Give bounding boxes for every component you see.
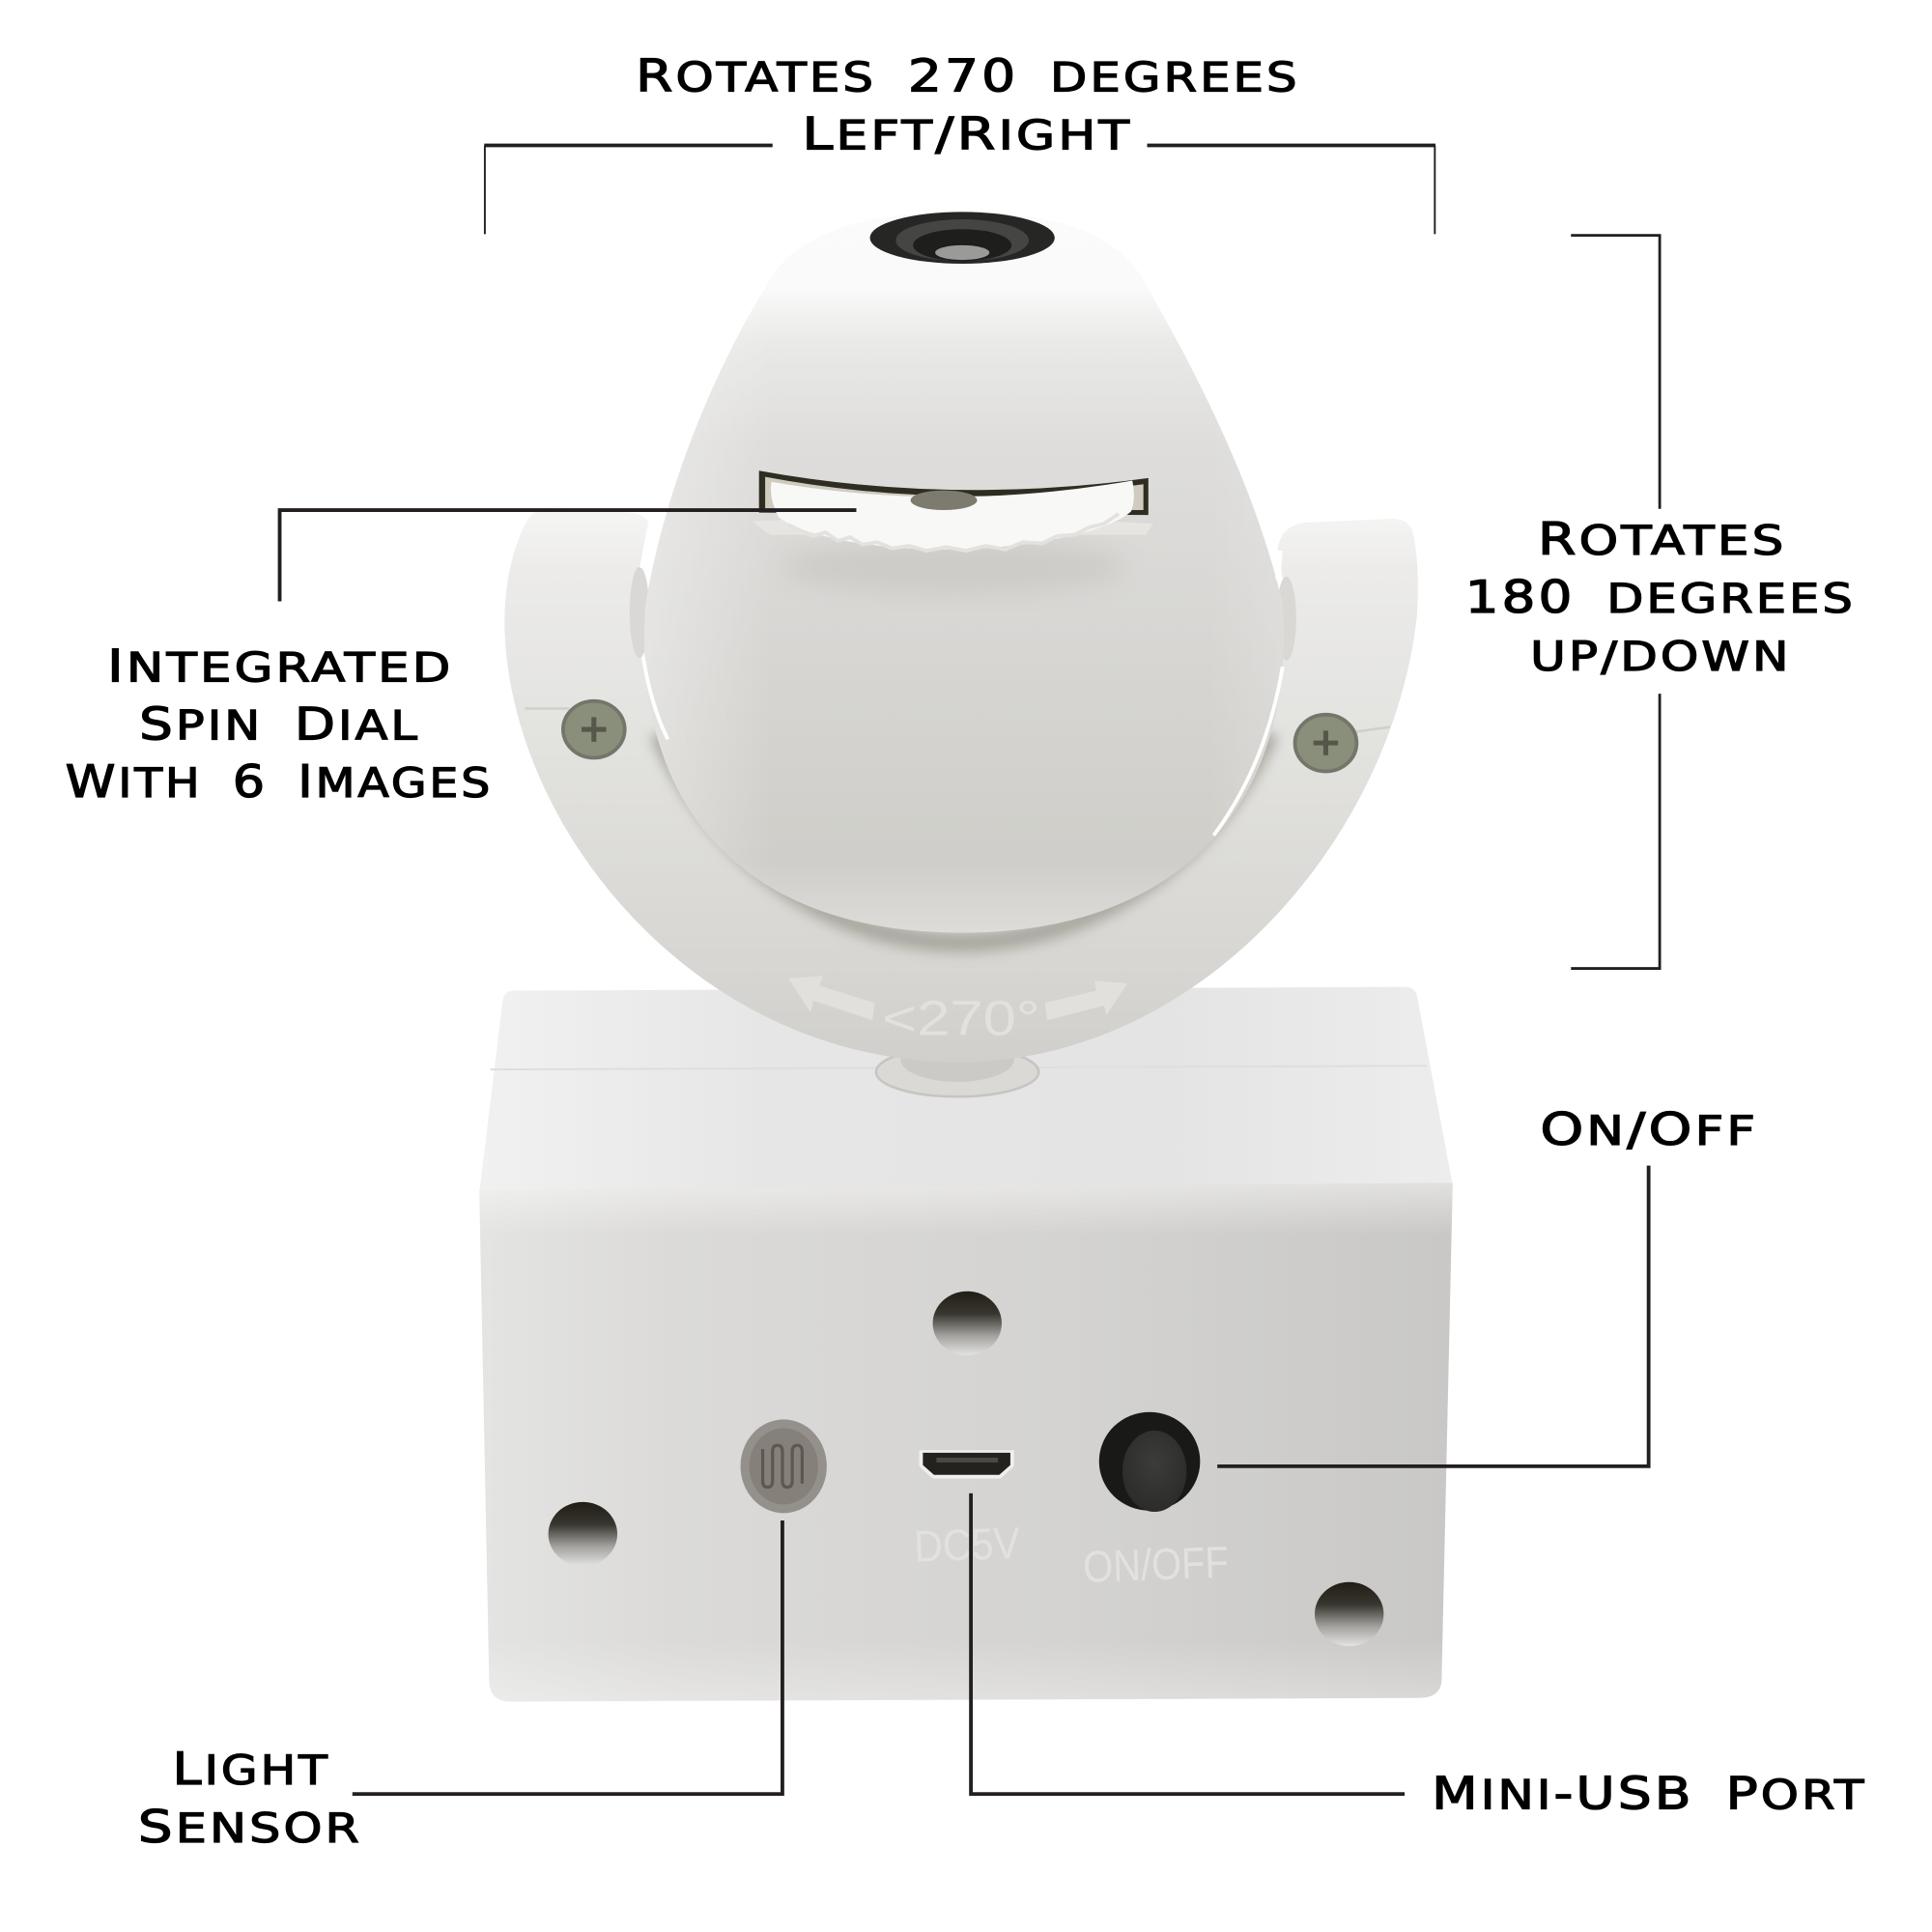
label: light sensor xyxy=(138,1743,362,1853)
label: integrated spin dial: WITH 6 I MAGES xyxy=(66,755,493,808)
holes xyxy=(549,1292,1383,1646)
label: light sensor: SENSOR xyxy=(138,1801,362,1853)
leader: mini-USB port xyxy=(971,1493,1405,1794)
lens xyxy=(870,212,1055,264)
heading: rotates 270 degrees left/right: LEFT /R IGHT xyxy=(802,107,1132,159)
mini-USB port xyxy=(920,1450,1014,1479)
label: integrated spin dial: SPIN D IAL xyxy=(139,697,420,750)
embossed DC5V: DC5V xyxy=(913,1518,1021,1572)
leader: light sensor xyxy=(353,1520,782,1794)
pivot left xyxy=(630,567,649,658)
bracket: up/down rotation xyxy=(1571,236,1660,969)
label: rotates 180 degrees up/down: 180 DEGREES xyxy=(1465,571,1856,623)
label: rotates 180 degrees up/down xyxy=(1465,513,1856,680)
screw left xyxy=(563,701,625,757)
embossed 270 degree mark: <270° xyxy=(882,990,1040,1045)
dial xyxy=(771,480,1134,550)
spin dial slot and dial xyxy=(752,470,1153,551)
heading: rotates 270 degrees left/right: ROTATES 270 DEGREES xyxy=(636,49,1300,101)
label: rotates 180 degrees up/down: UP/DOWN xyxy=(1530,634,1792,680)
heading: rotates 270 degrees left/right xyxy=(636,49,1300,159)
leader: on/off xyxy=(1217,1166,1649,1466)
bracket: left/right rotation xyxy=(484,146,1435,234)
label: rotates 180 degrees up/down: R OTATES xyxy=(1538,513,1786,565)
light sensor xyxy=(741,1419,827,1513)
label: integrated spin dial: INTEGRATED xyxy=(107,639,453,692)
leader: spin dial xyxy=(280,510,856,601)
panel: product photo xyxy=(479,212,1453,1701)
embossed 270 degree mark xyxy=(788,976,1127,1045)
embossed ON/OFF: ON/OFF xyxy=(1082,1537,1230,1592)
base block xyxy=(479,987,1453,1701)
label: mini-USB port: M INI -USB P ORT xyxy=(1432,1767,1866,1819)
label: integrated spin dial xyxy=(66,639,493,808)
U bracket xyxy=(504,506,1418,1062)
power button xyxy=(1099,1412,1200,1512)
screw right xyxy=(1295,715,1356,771)
projector body xyxy=(642,212,1284,933)
foot under bracket xyxy=(876,1037,1038,1096)
pivot right xyxy=(1276,577,1296,661)
label: light sensor: LIGHT xyxy=(173,1743,330,1795)
label: on/off: O N/O FF xyxy=(1540,1103,1758,1155)
